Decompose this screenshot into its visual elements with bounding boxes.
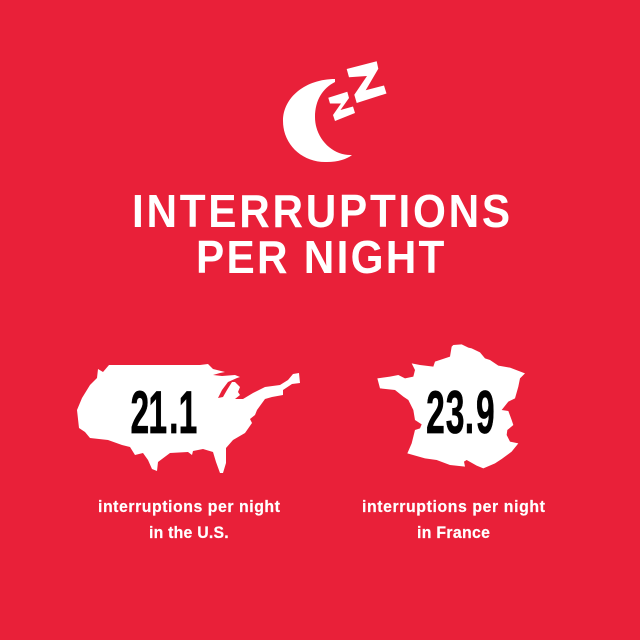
- caption: France: [362, 498, 545, 542]
- caption: U.S.: interruptions per night: [98, 498, 281, 516]
- title: INTERRUPTIONS: [132, 186, 510, 237]
- caption: France: in France: [417, 524, 490, 542]
- title: [132, 186, 510, 283]
- map: France: [377, 344, 525, 468]
- panel: France: [362, 344, 545, 542]
- title: PER NIGHT: [196, 232, 444, 283]
- icon: crescent moon with sleeping Zs: [283, 61, 386, 162]
- number: France value: 23.9: [426, 380, 495, 447]
- map: United States: [77, 364, 300, 473]
- number: U.S. value: 21.1: [130, 380, 197, 447]
- caption: U.S.: in the U.S.: [149, 524, 229, 542]
- caption: France: interruptions per night: [362, 498, 545, 516]
- panel: United States: [77, 364, 300, 542]
- caption: U.S.: [98, 498, 281, 542]
